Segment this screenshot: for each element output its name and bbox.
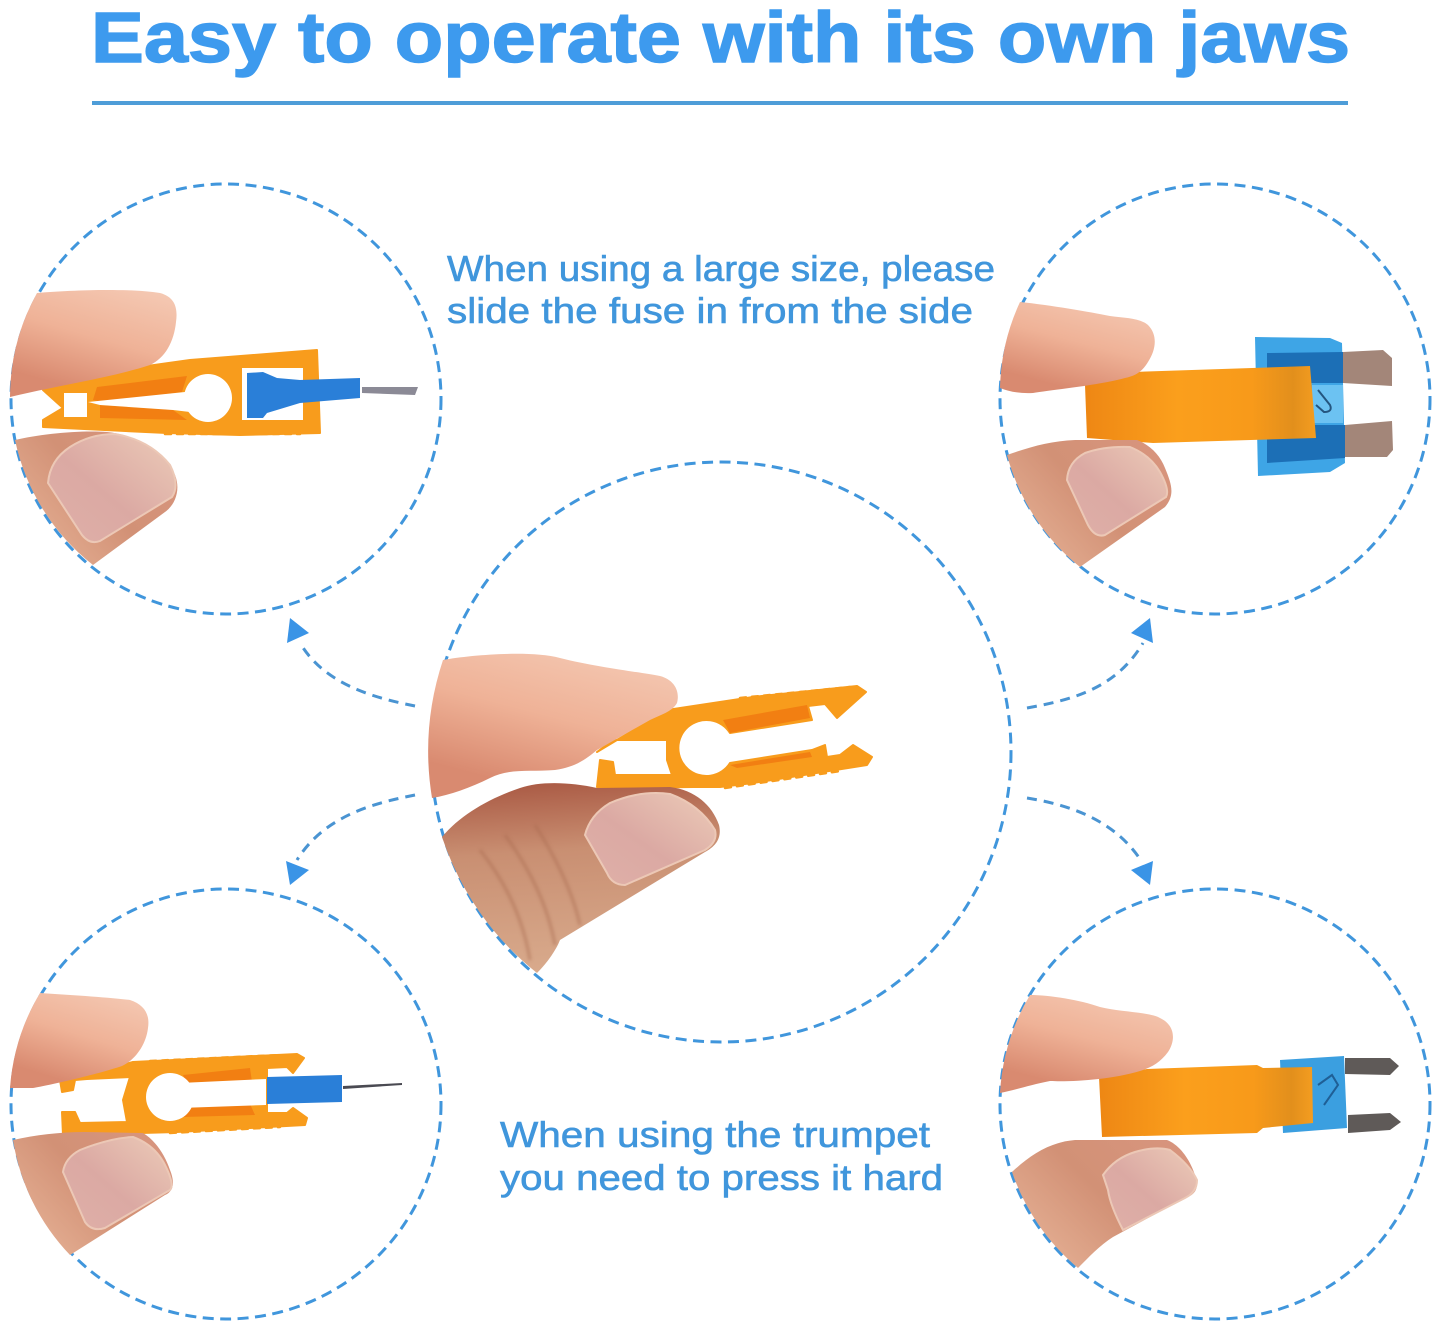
title underline <box>92 101 1348 105</box>
thumb creases <box>480 825 580 960</box>
thumbnail <box>48 434 176 542</box>
arrow: center to top-left <box>287 618 415 706</box>
blue needle hub <box>247 372 360 418</box>
index finger <box>10 993 148 1088</box>
caption: large size: slide the fuse in from the side <box>447 290 973 331</box>
arrow: center to bottom-right <box>1027 798 1153 885</box>
thumbnail <box>1103 1148 1197 1230</box>
thumbnail <box>585 793 716 885</box>
index finger <box>1000 302 1155 393</box>
thumbnail <box>63 1137 172 1229</box>
dashed circle top-left <box>11 184 441 614</box>
caption: large size: When using a large size, please <box>447 248 995 289</box>
panel: top-right large fuse <box>1000 184 1430 614</box>
arrow: center to bottom-left <box>286 795 415 885</box>
needle tip <box>362 387 418 395</box>
dashed circle center <box>431 462 1011 1042</box>
arrow: center to top-right <box>1027 618 1153 708</box>
panel: bottom-right mini fuse <box>1000 889 1430 1319</box>
dashed circle bottom-left <box>11 889 441 1319</box>
thumb <box>13 1132 173 1255</box>
thumb <box>1007 440 1171 567</box>
mini blade fuse <box>1280 1056 1401 1133</box>
index finger <box>1000 995 1173 1093</box>
caption: trumpet <box>500 1114 943 1198</box>
needle tip <box>343 1083 402 1089</box>
thumbnail <box>1067 447 1167 536</box>
panel: top-left needle fuse in jaws <box>10 184 441 614</box>
thumb <box>1012 1140 1197 1268</box>
caption: trumpet: When using the trumpet <box>500 1114 930 1155</box>
title: Easy to operate with its own jaws <box>91 0 1350 78</box>
blue needle hub <box>267 1075 342 1104</box>
thumb <box>15 431 177 565</box>
caption: large size <box>447 248 995 331</box>
orange puller <box>60 1054 307 1135</box>
dashed circle bottom-right <box>1000 889 1430 1319</box>
index finger <box>10 290 177 397</box>
blade fuse <box>1255 337 1393 476</box>
panel: center open jaws <box>428 462 1011 1042</box>
orange jaws <box>597 686 872 788</box>
orange puller flat <box>1085 366 1316 443</box>
orange puller <box>43 350 320 435</box>
orange puller flat <box>1099 1065 1313 1137</box>
thumb <box>442 783 720 973</box>
caption: trumpet: you need to press it hard <box>500 1157 943 1198</box>
dashed circle top-right <box>1000 184 1430 614</box>
index finger <box>428 654 678 798</box>
panel: bottom-left trumpet needle <box>10 889 441 1319</box>
